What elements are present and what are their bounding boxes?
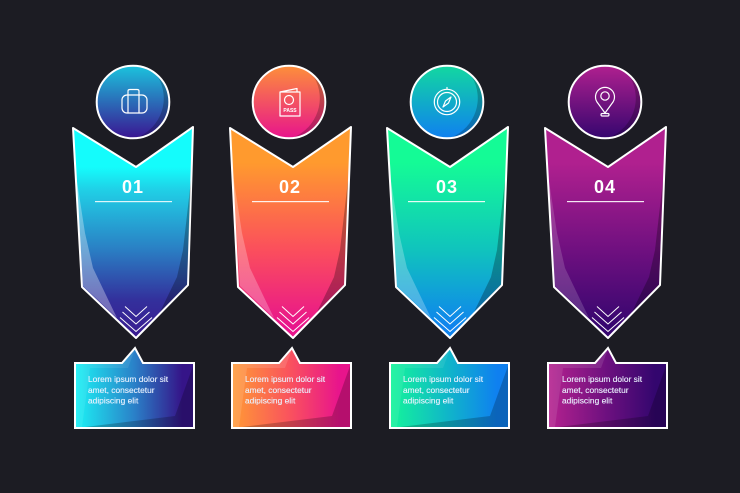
icon: map pin <box>596 87 615 116</box>
chevrons <box>592 306 624 332</box>
column 3 <box>387 66 509 428</box>
column 2 <box>230 66 351 428</box>
chevrons <box>434 306 466 332</box>
shield 2 <box>230 127 351 338</box>
number 02: 02 <box>279 177 301 197</box>
number 04: 04 <box>594 177 616 197</box>
column 1 <box>73 66 194 428</box>
icon: suitcase <box>122 90 147 113</box>
icon circle 4 <box>569 66 641 138</box>
callout box 1 <box>75 348 194 428</box>
callout text 3: Lorem ipsum dolor sit <box>403 374 484 384</box>
callout text 1: amet, consectetur <box>88 385 155 395</box>
callout box 3 <box>390 348 509 428</box>
shield 3 <box>387 127 508 338</box>
callout text 1: adipiscing elit <box>88 396 139 406</box>
callout text 2: Lorem ipsum dolor sit <box>245 374 326 384</box>
number 03: 03 <box>436 177 458 197</box>
callout text 4: adipiscing elit <box>562 396 613 406</box>
icon circle 1 <box>97 66 169 138</box>
divider <box>408 201 485 202</box>
icon circle 2 <box>253 66 325 138</box>
callout box 4 <box>548 348 667 428</box>
chevrons <box>120 306 152 332</box>
divider <box>95 201 172 202</box>
callout text 2: amet, consectetur <box>245 385 312 395</box>
chevrons <box>277 306 309 332</box>
shield 1 <box>73 127 193 338</box>
icon: passport <box>280 88 300 116</box>
divider <box>252 201 329 202</box>
callout text 1: Lorem ipsum dolor sit <box>88 374 169 384</box>
column 4 <box>545 66 667 428</box>
icon: compass <box>434 88 460 115</box>
shield 4 <box>545 127 666 338</box>
icon circle 3 <box>411 66 483 138</box>
icon: passport: PASS <box>283 108 297 114</box>
number 01: 01 <box>122 177 144 197</box>
callout text 4: amet, consectetur <box>562 385 629 395</box>
callout text 2: adipiscing elit <box>245 396 296 406</box>
callout text 3: amet, consectetur <box>403 385 470 395</box>
callout text 3: adipiscing elit <box>403 396 454 406</box>
divider <box>567 201 644 202</box>
callout box 2 <box>232 348 351 428</box>
callout text 4: Lorem ipsum dolor sit <box>562 374 643 384</box>
